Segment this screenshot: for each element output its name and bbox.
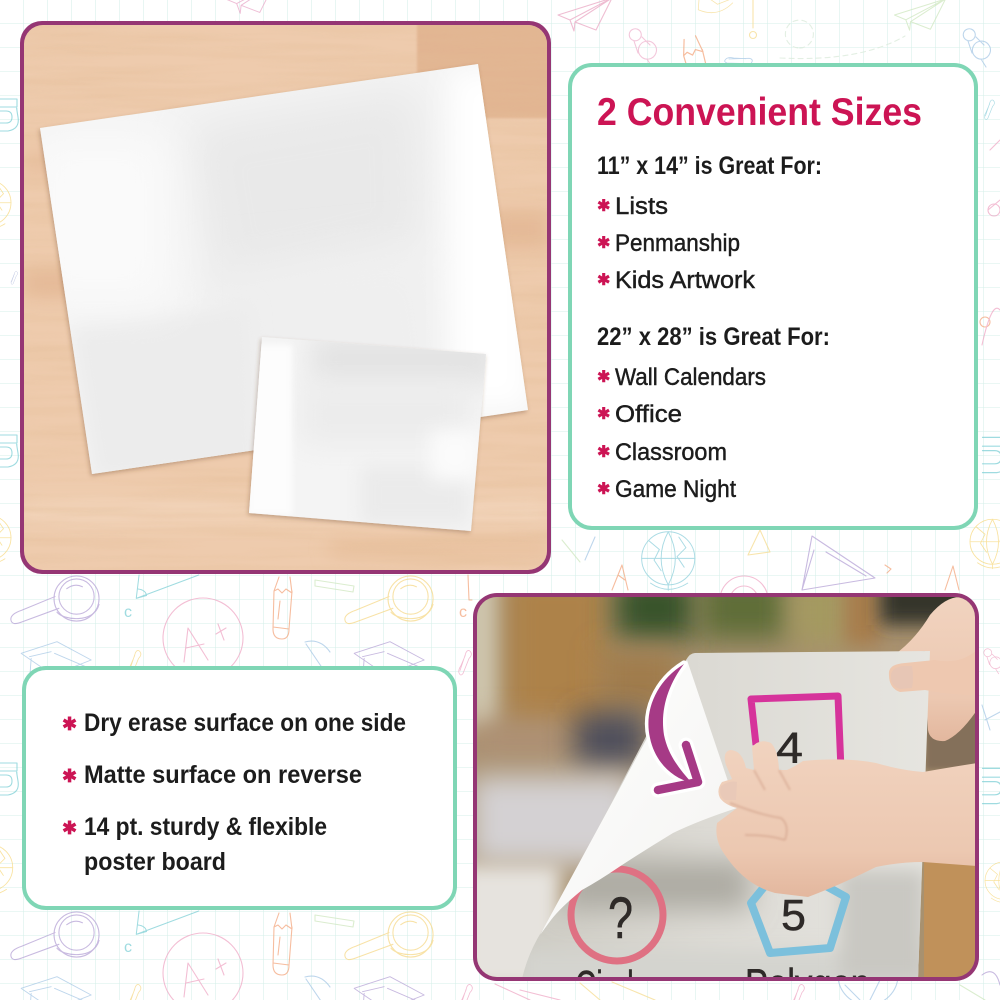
lower hand	[716, 741, 977, 897]
list: 22 x 28 uses: Game Night	[615, 476, 736, 503]
cut off marker labels	[578, 967, 866, 977]
marker pentagon with number 5: 5	[781, 891, 806, 940]
feature: dry erase: Dry erase surface on one side	[84, 709, 406, 737]
list: 11 x 14 uses: Penmanship	[615, 230, 740, 257]
left strip doodles	[0, 99, 18, 896]
top strip doodles	[27, 0, 990, 106]
middle left doodles: c	[459, 604, 467, 621]
panel: convenient sizes	[570, 65, 976, 528]
list: 22 x 28 uses: Classroom	[615, 439, 727, 466]
subheading: 22 x 28: 22” x 28” is Great For:	[597, 323, 830, 351]
feature: sturdy board	[62, 813, 327, 876]
list: 22 x 28 uses: ✱	[597, 444, 610, 461]
small 11 x 14 poster board	[248, 335, 500, 531]
feature: matte reverse: Matte surface on reverse	[84, 761, 362, 789]
list: 22 x 28 uses: Wall Calendars	[615, 364, 766, 391]
list: 11 x 14 uses: ✱	[597, 272, 610, 289]
arrow: flip direction	[648, 664, 698, 790]
panel: wood photo with two poster boards	[20, 21, 551, 574]
list: 11 x 14 uses: ✱	[597, 198, 610, 215]
list: 22 x 28 uses: ✱	[597, 369, 610, 386]
list: 11 x 14 uses: ✱	[597, 235, 610, 252]
list: 11 x 14 uses	[597, 193, 756, 294]
middle left doodles: c	[124, 604, 132, 621]
list: 22 x 28 uses: ✱	[597, 481, 610, 498]
feature: matte reverse: ✱	[62, 766, 77, 786]
subheading: 11 x 14: 11” x 14” is Great For:	[597, 152, 822, 180]
middle right doodles	[562, 519, 1000, 624]
blurred room background	[477, 597, 975, 977]
list: 22 x 28 uses	[597, 364, 766, 503]
right strip doodles	[980, 100, 1000, 985]
list: 11 x 14 uses: Lists	[615, 193, 668, 220]
bottom doodles	[11, 911, 985, 1000]
list: 11 x 14 uses: Kids Artwork	[615, 267, 756, 294]
marker circle with question mark: ?	[608, 886, 633, 951]
curled flap of board	[540, 660, 737, 935]
heading: 2 Convenient Sizes: 2 Convenient Sizes	[597, 91, 922, 134]
feature: dry erase: ✱	[62, 714, 77, 734]
feature: sturdy board: 14 pt. sturdy & flexible	[84, 813, 327, 841]
back of board with marker drawings	[520, 651, 930, 1000]
upper hand: thumb	[889, 660, 930, 692]
bottom doodles: c	[124, 939, 132, 956]
feature: sturdy board: ✱	[62, 818, 77, 838]
marker circle with question mark	[571, 869, 663, 961]
wood surface	[22, 23, 550, 572]
marker square with number 4: 4	[776, 724, 803, 773]
list: 22 x 28 uses: ✱	[597, 406, 610, 423]
marker pentagon with number 5	[751, 886, 846, 953]
panel: photo of hands flipping board	[473, 593, 979, 981]
feature: sturdy board: poster board	[84, 848, 226, 876]
large 22 x 28 poster board	[30, 64, 530, 480]
upper hand: fingers behind board	[894, 597, 977, 741]
middle left doodles	[11, 575, 472, 685]
panel: features	[24, 668, 455, 908]
marker square with number 4	[751, 696, 841, 773]
list: 22 x 28 uses: Office	[615, 401, 682, 428]
